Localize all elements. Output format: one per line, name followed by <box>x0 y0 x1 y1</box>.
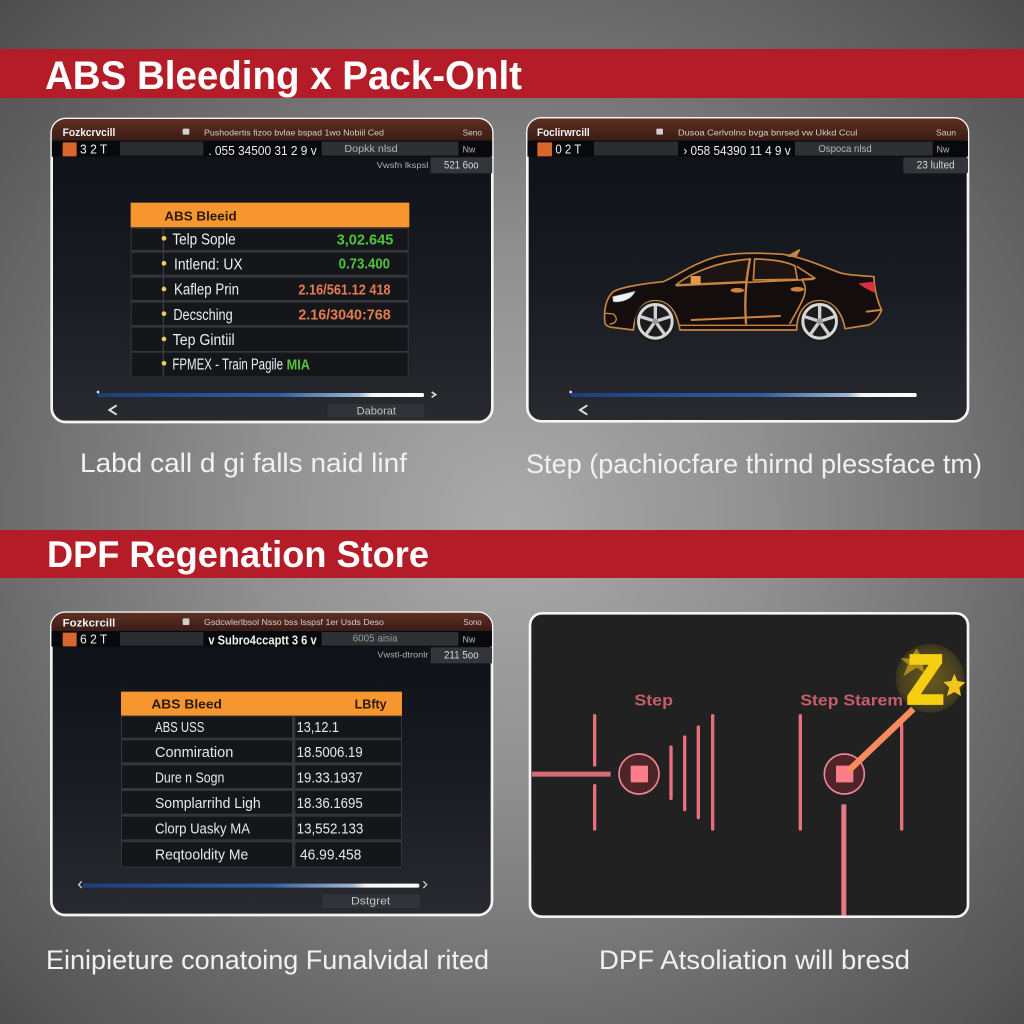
table: ABS bleed values: Tep Gintiil <box>173 332 235 349</box>
panel: car screen: › 058 54390 11 4 9 v <box>683 143 791 158</box>
caption: right bottom: DPF Atsoliation will bresd <box>599 945 910 975</box>
table: ABS bleed data: 18.5006.19 <box>297 745 363 761</box>
panel: data table screen: 6005 aisia <box>353 634 398 645</box>
table: ABS bleed values: 0.73.400 <box>339 257 390 273</box>
progress bar <box>97 391 436 397</box>
table: ABS bleed data: 13,552.133 <box>297 822 363 838</box>
table: ABS bleed data: LBfty <box>355 697 387 712</box>
table: ABS bleed data: Dure n Sogn <box>155 770 224 786</box>
table: ABS bleed data: ABS Bleed <box>151 697 222 712</box>
table: ABS bleed values: ABS Bleeid <box>164 209 237 224</box>
button <box>322 894 420 908</box>
diagram: left step <box>532 716 713 829</box>
panel: data table screen: Fozkcrcill <box>63 617 115 629</box>
panel: car screen: Ospoca nlsd <box>818 144 872 155</box>
panel: car screen: 0 2 T <box>555 141 581 156</box>
panel: ABS bleed screen: 3 2 T <box>80 141 107 156</box>
table: ABS bleed data: Reqtooldity Me <box>155 847 248 863</box>
panel: ABS bleed screen: 521 6oo <box>444 160 479 172</box>
panel: data table screen: Gsdcwlerlbsol Nsso bss lsspsf 1er Usds Deso <box>204 617 384 627</box>
panel: data table screen: 6 2 T <box>80 631 107 646</box>
table: ABS bleed data: ABS USS <box>155 720 204 736</box>
table: ABS bleed values: 3,02.645 <box>337 233 393 249</box>
panel: ABS bleed screen: Nw <box>463 145 476 155</box>
icon: gold Z badge: Z <box>907 641 944 719</box>
button <box>328 404 424 417</box>
table: ABS bleed data: Conmiration <box>155 745 233 761</box>
progress bar <box>569 391 917 397</box>
panel: ABS bleed screen: Dopkk nlsd <box>344 144 398 155</box>
table: ABS bleed data: Somplarrihd Ligh <box>155 796 261 812</box>
panel: car screen: Nw <box>937 145 950 155</box>
table: ABS bleed values: 2.16/3040:768 <box>298 308 391 324</box>
caption: left bottom: Einipieture conatoing Funalvidal rited <box>46 945 489 975</box>
table: ABS bleed values: 2.16/561.12 418 <box>298 282 391 298</box>
table: ABS bleed data: 13,12.1 <box>297 720 339 736</box>
icon: front wheel <box>636 302 675 341</box>
table: ABS bleed values: Telp Sople <box>172 232 236 249</box>
progress bar <box>79 881 427 888</box>
banner: DPF Regenation <box>0 530 1024 578</box>
panel: ABS bleed screen <box>52 119 492 422</box>
button: Dstgret <box>351 895 390 907</box>
panel: step diagram <box>530 613 968 917</box>
table: ABS bleed values: Decsching <box>173 307 233 324</box>
caption: left top: Labd call d gi falls naid linf <box>80 448 408 478</box>
icon: rear wheel <box>800 302 839 341</box>
table: ABS bleed values: Intlend: UX <box>174 256 243 273</box>
panel: data table screen <box>51 613 492 915</box>
label: Step: Step <box>634 692 673 709</box>
table: ABS bleed values <box>131 203 409 376</box>
panel: ABS bleed screen: Fozkcrvcill <box>63 127 115 139</box>
table: ABS bleed values: FPMEX - Train Pagile <box>172 356 283 373</box>
panel: car screen: 23 lulted <box>917 160 955 172</box>
icon: gold Z badge <box>896 641 965 719</box>
banner: ABS Bleeding: ABS Bleeding x Pack-Onlt <box>45 54 522 98</box>
panel: ABS bleed screen: . 055 34500 31 2 9 v <box>208 143 317 158</box>
button: Daborat <box>357 405 396 417</box>
panel: data table screen: 211 5oo <box>444 650 479 662</box>
table: ABS bleed data: 19.33.1937 <box>297 770 363 786</box>
table: ABS bleed data: Clorp Uasky MA <box>155 822 250 838</box>
panel: ABS bleed screen: Vwsfn lkspsl <box>377 160 428 170</box>
banner: ABS Bleeding <box>0 49 1024 98</box>
table: ABS bleed values: Kaflep Prin <box>174 282 239 299</box>
label: Step Starem: Step Starem <box>800 692 903 709</box>
diagram: right step <box>800 709 913 915</box>
panel: data table screen: Sono <box>463 617 482 627</box>
panel: car screen: Dusoa Cerlvolno bvga bnrsed vw Ukkd Ccul <box>678 127 857 137</box>
panel: ABS bleed screen: Pushodertis fizoo bvlae bspad 1wo Nobiil Ced <box>204 127 384 137</box>
panel: car screen <box>527 118 968 421</box>
panel: data table screen: Nw <box>463 634 476 644</box>
table: ABS bleed values: MIA <box>287 357 310 373</box>
panel: data table screen: v Subro4ccaptt 3 6 v <box>208 633 317 647</box>
table: ABS bleed data <box>121 692 402 868</box>
panel: car screen: Saun <box>936 127 956 137</box>
caption: right top: Step (pachiocfare thirnd plessface tm) <box>526 449 982 479</box>
panel: car screen: Foclirwrcill <box>537 127 590 139</box>
icon: car outline <box>605 250 882 330</box>
panel: ABS bleed screen: Seno <box>463 127 482 137</box>
banner: DPF Regenation: DPF Regenation Store <box>47 534 429 575</box>
table: ABS bleed data: 18.36.1695 <box>297 796 363 812</box>
table: ABS bleed data: 46.99.458 <box>300 847 361 863</box>
panel: data table screen: Vwstl-dtronlr <box>377 650 428 660</box>
